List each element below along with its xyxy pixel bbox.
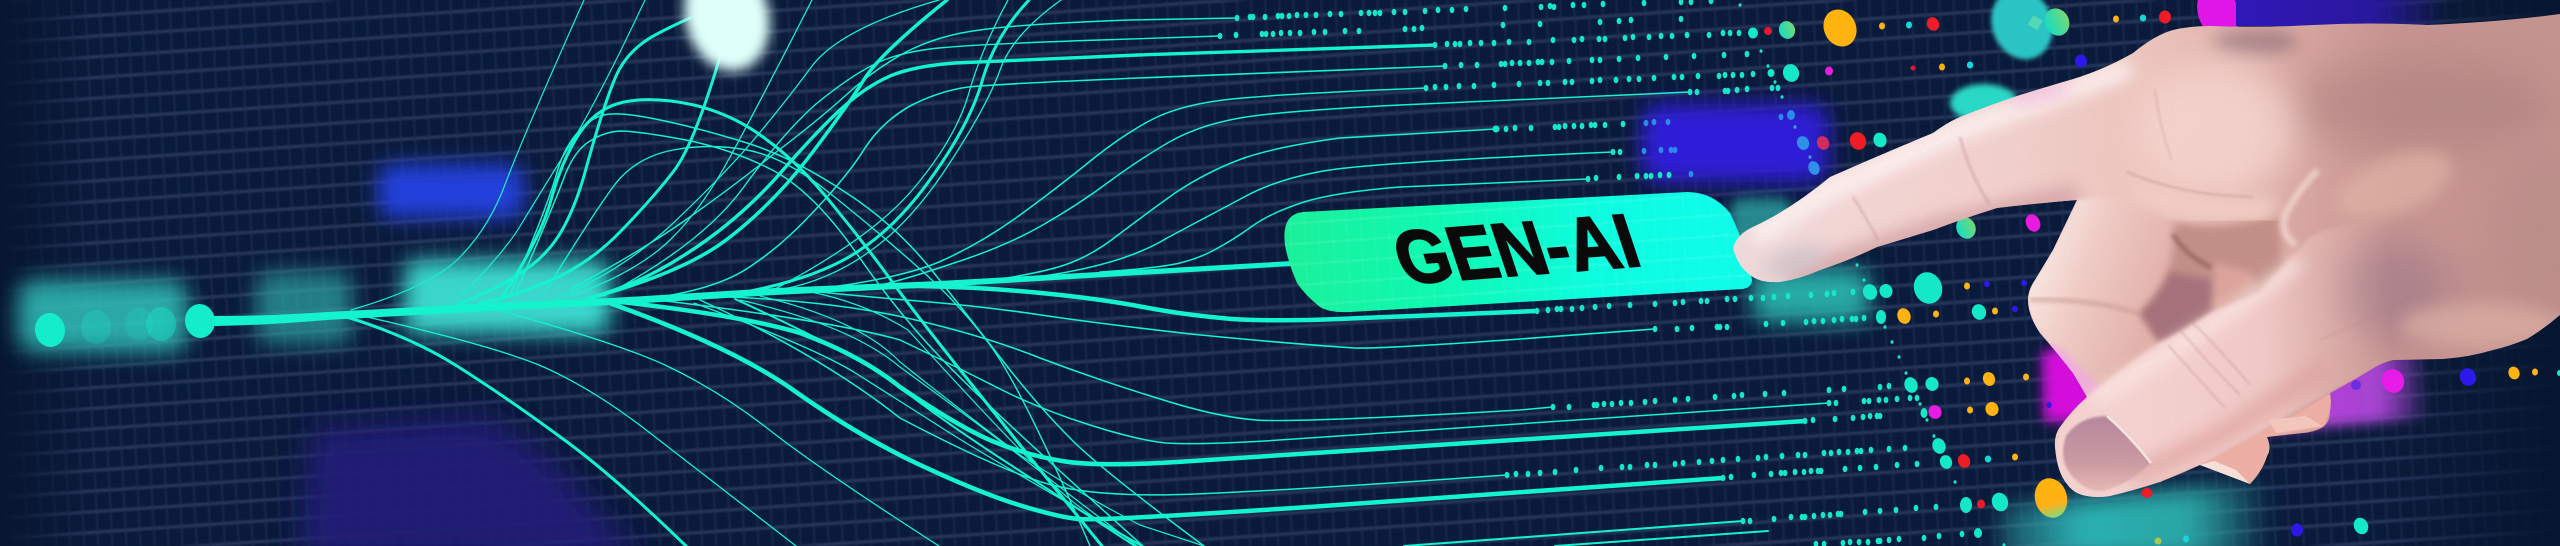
cavity lower shadow	[2140, 272, 2215, 343]
node: trunk start	[183, 303, 217, 339]
palm fold highlight	[2135, 185, 2275, 210]
fingertip shade	[1763, 242, 1824, 282]
GEN-AI button	[1284, 192, 1752, 312]
middle finger	[2028, 198, 2175, 397]
index finger underside	[1790, 195, 2078, 280]
magenta tint on middle finger	[2048, 342, 2098, 395]
descending strands	[340, 290, 1204, 546]
blob: bright teal	[404, 260, 610, 334]
node: faded	[81, 310, 111, 344]
shade: back of hand	[2290, 55, 2550, 155]
hand silhouette	[1733, 14, 2560, 497]
right edge fade	[2380, 0, 2560, 546]
blob: purple right	[2260, 352, 2430, 432]
shade: thumb base	[2332, 240, 2452, 340]
node: faded	[146, 307, 176, 341]
blob: top teal ellipse	[1981, 0, 2063, 68]
blob: lower indigo	[300, 418, 645, 546]
blob: teal behind fingertip	[1730, 198, 1792, 248]
thumbnail edge	[2107, 416, 2151, 463]
index finger top highlight	[1753, 68, 2130, 237]
data dots: blue-tinted on blue block	[1642, 114, 1783, 177]
cavity crease	[2173, 234, 2212, 268]
tucked fingers	[2200, 378, 2357, 484]
hand ridge highlight	[2284, 170, 2318, 245]
folded finger lit	[2212, 262, 2258, 315]
source nodes	[33, 303, 217, 349]
blob: magenta by thumb	[2042, 345, 2110, 422]
hand shading	[1720, 10, 2560, 510]
blob: teal near finger	[1950, 84, 2018, 122]
data dots: teal rows	[1218, 0, 1964, 546]
blob: left teal	[18, 280, 188, 352]
palm cavity	[2140, 214, 2283, 343]
thumb top highlight	[2095, 262, 2300, 400]
node: faded	[125, 307, 153, 341]
hand pointing at button	[1720, 10, 2560, 510]
blob: teal below fingertip	[1752, 268, 1870, 322]
left edge fade	[0, 0, 90, 546]
magenta tint on finger	[2009, 81, 2072, 111]
light: thumb base	[2341, 147, 2453, 220]
blob: blue	[378, 164, 524, 218]
skin creases	[1852, 90, 2253, 408]
trunk	[200, 261, 1292, 326]
node: far left	[33, 311, 67, 349]
skin texture	[1758, 72, 2246, 482]
shade: wrist	[2508, 182, 2560, 320]
thumbnail	[2063, 416, 2151, 491]
data dots: small orange	[1879, 16, 2538, 460]
tucked nail	[2200, 461, 2250, 484]
button grid overlay	[1284, 192, 1752, 312]
blob: right blue	[1642, 104, 1828, 182]
upper right strands	[571, 18, 1690, 298]
tucked nail upper	[2268, 416, 2322, 433]
knuckle fold	[2030, 300, 2140, 314]
button shape	[1284, 192, 1752, 312]
shade: knuckle bruise	[2213, 30, 2297, 54]
light: wrist underside	[2400, 303, 2560, 347]
blob: top magenta	[2190, 0, 2246, 45]
blob: teal bottom	[2000, 480, 2272, 546]
thumb	[2055, 226, 2370, 497]
upward strands	[351, 0, 1204, 546]
blob: second teal	[256, 272, 352, 344]
blob: top right indigo	[2236, 0, 2446, 26]
data dots: tiny column	[1738, 3, 2006, 546]
lower right strands	[612, 286, 1829, 546]
flow lines from source node	[200, 0, 1829, 546]
thumb lower blush	[2130, 365, 2330, 478]
data dots: larger coloured	[1748, 4, 2560, 545]
light: palm side	[2135, 60, 2295, 200]
white glow blob	[673, 0, 781, 80]
button label: GEN-AI	[1383, 199, 1650, 300]
